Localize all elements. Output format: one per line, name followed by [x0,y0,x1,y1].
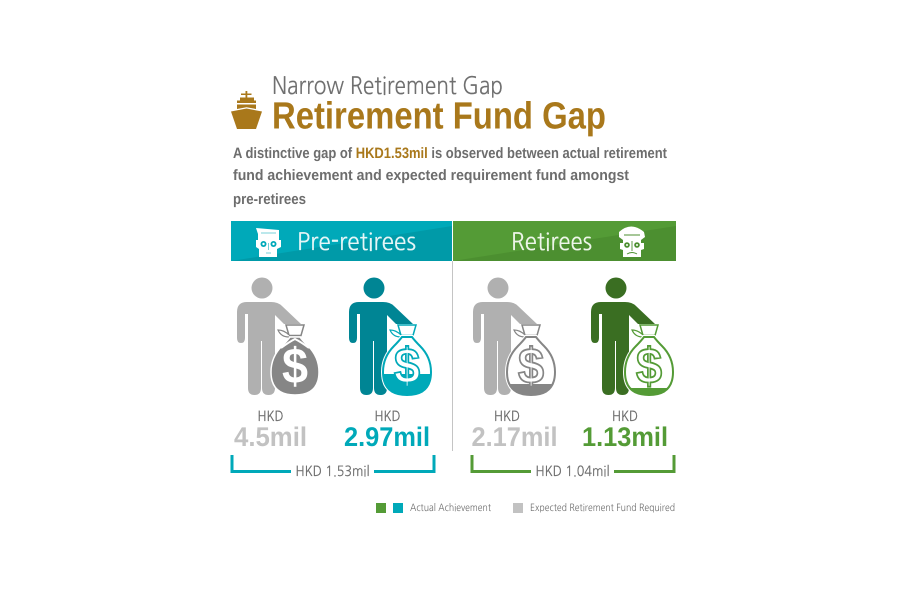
figure: retiree actual [591,278,673,395]
legend [376,503,675,513]
value labels: pre-retirees [234,410,430,452]
subtitle: Narrow Retirement Gap [272,74,503,98]
legend: Expected Retirement Fund Required [530,503,675,513]
heading: pre-retirees: Pre-retirees [297,230,416,254]
figure: pre-retiree expected [237,278,319,395]
icon: person [237,278,301,395]
value labels: pre-retirees: 2.97mil [344,422,430,452]
description text: A distinctive gap of HKD1.53mil is observed between actual retirement [233,145,667,162]
heading: retirees: Retirees [511,230,592,254]
icon: money bag: $ [636,338,662,394]
icon: money bag: $ [518,338,544,394]
icon: money bag: $ [282,338,308,394]
infographic [230,76,676,513]
legend: Actual Achievement [410,503,491,513]
value labels: pre-retirees: 4.5mil [234,422,307,452]
panel: retirees header [453,221,676,261]
icon: pre-retiree face [256,228,281,257]
value labels: retirees: 2.17mil [472,422,558,452]
description text [233,145,667,208]
icon: ship [231,91,262,129]
divider [452,261,453,451]
figure: pre-retiree actual [349,278,431,395]
value labels: pre-retirees: HKD [258,410,284,424]
panel: pre-retirees header [231,221,452,261]
value labels: retirees: 1.13mil [582,422,668,452]
icon: person [473,278,537,395]
description text: fund achievement and expected requirement fund amongst [233,167,629,184]
icon: person [349,278,413,395]
value labels: retirees: HKD [612,410,638,424]
value labels: retirees: HKD [494,410,520,424]
value labels: retirees [472,410,668,452]
icon: money bag: $ [394,338,420,394]
icon: retiree face [619,226,645,257]
bracket: retirees gap [472,455,674,479]
icon: person [591,278,655,395]
bracket: pre-retirees gap [232,455,434,479]
description text: pre-retirees [233,191,306,208]
bracket: pre-retirees gap: HKD 1.53mil [296,464,370,479]
value labels: pre-retirees: HKD [374,410,400,424]
figure: retiree expected [473,278,555,395]
title: Retirement Fund Gap [272,96,606,138]
bracket: retirees gap: HKD 1.04mil [536,464,610,479]
